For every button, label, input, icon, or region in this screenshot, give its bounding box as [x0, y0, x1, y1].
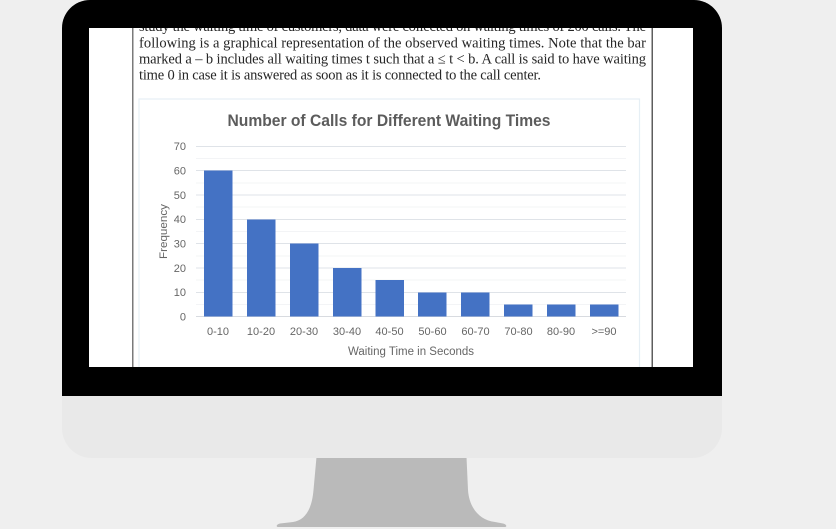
x axis labels: 70-80: [504, 326, 533, 338]
x axis labels: 40-50: [375, 326, 404, 338]
screen content: [89, 19, 693, 367]
y axis labels: 50: [174, 190, 186, 202]
x axis labels: [207, 326, 617, 338]
document page borders: [132, 28, 653, 367]
question text: following is a graphical representation of the observed waiting times. Note that the bar: [139, 36, 646, 52]
x axis labels: >=90: [591, 326, 617, 338]
chart title: Number of Calls for Different Waiting Times: [228, 112, 550, 130]
y axis labels: 60: [174, 166, 186, 178]
x axis title: Waiting Time in Seconds: [348, 346, 474, 358]
question text: [139, 19, 646, 84]
y axis labels: [174, 141, 186, 324]
y axis labels: 70: [174, 141, 186, 153]
monitor chin: [62, 390, 722, 458]
y axis title: Frequency: [158, 203, 170, 259]
x axis labels: 30-40: [333, 326, 361, 338]
y axis labels: 40: [174, 214, 186, 226]
y axis labels: 0: [180, 312, 186, 324]
monitor stand: [277, 457, 506, 527]
x axis labels: 80-90: [547, 326, 575, 338]
x axis labels: 60-70: [461, 326, 490, 338]
chart panel: [139, 99, 640, 367]
y axis labels: 30: [174, 238, 186, 250]
question text: marked a – b includes all waiting times t such that a ≤ t < b. A call is said to have waiting: [139, 52, 646, 68]
y axis labels: 10: [174, 287, 186, 299]
y axis labels: 20: [174, 263, 186, 275]
question text: time 0 in case it is answered as soon as it is connected to the call center.: [139, 68, 541, 84]
x axis labels: 0-10: [207, 326, 229, 338]
x axis labels: 20-30: [290, 326, 318, 338]
x axis labels: 10-20: [247, 326, 275, 338]
bars: [204, 170, 618, 316]
x axis labels: 50-60: [418, 326, 447, 338]
monitor black bezel: [62, 0, 722, 396]
question text: study the waiting time of customers, data were collected on waiting times of 200 calls. The: [139, 19, 646, 35]
gridlines: [196, 146, 626, 316]
